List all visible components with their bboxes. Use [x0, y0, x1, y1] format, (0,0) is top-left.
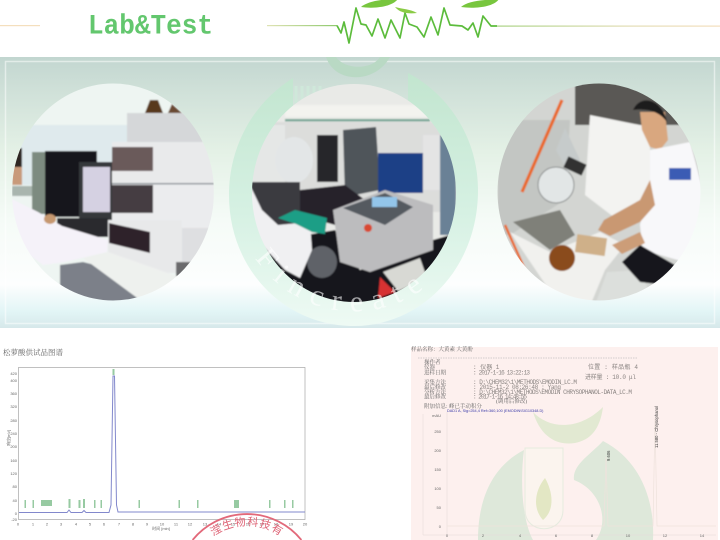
x axis labels: 7: [118, 522, 121, 526]
chart: left chromatogram: [3, 347, 308, 540]
chart title: 松萝酸供试品图谱: [3, 347, 63, 357]
x axis labels: 5: [89, 522, 92, 526]
x axis labels: 19: [289, 522, 294, 526]
report sheet: 11.580 - Chrysophanol: [654, 406, 659, 448]
peak labels: 9.606: [606, 450, 611, 461]
instrument stack: [127, 113, 203, 143]
method metadata: : D:\CHEM32\1\METHODS\EMODIN CHRYSOPHANOL-DATA_LC.M: [473, 389, 632, 396]
baseline and peaks: [19, 376, 305, 512]
x axis labels: 0: [17, 522, 20, 526]
photo: lab bench analyser: [250, 80, 460, 306]
chart x labels: 14: [700, 533, 705, 538]
x axis labels: 1: [32, 522, 35, 526]
x axis labels: 4: [75, 522, 78, 526]
method metadata: 采集方法: [424, 378, 447, 386]
chart x labels: 8: [591, 533, 594, 538]
chart y labels: 200: [434, 448, 442, 453]
chart x labels: 0: [446, 533, 449, 538]
glove and sleeve: [250, 185, 312, 278]
method metadata: 进样日期: [424, 368, 447, 376]
scientist: [640, 112, 668, 150]
chart y labels: 100: [434, 486, 442, 491]
x axis labels: 6: [103, 522, 106, 526]
x axis labels: 8: [132, 522, 135, 526]
chart x labels: [446, 534, 704, 537]
method metadata: : 2017-1-16 14:48:55: [473, 394, 527, 400]
icon: heartbeat line with leaves: [337, 0, 499, 43]
chart y labels: 50: [437, 505, 442, 510]
y axis labels: 400: [10, 378, 18, 383]
method metadata: 最后修改: [424, 392, 447, 400]
method metadata: : D:\CHEM32\1\METHODS\EMODIN_LC.M: [473, 379, 577, 386]
signal title: DAD1 A, Sig=254,4 Ref=360,100 (EMODIN\SIG10348.D): [447, 409, 544, 413]
watermark logo: [229, 57, 478, 326]
chart x labels: 6: [555, 533, 558, 538]
chart y labels: [432, 413, 442, 529]
bench: [510, 232, 620, 300]
y axis labels: 120: [10, 471, 18, 476]
stamp seal: [192, 513, 302, 540]
glass beaker: [307, 246, 337, 278]
method metadata: 最后修改: [424, 383, 447, 391]
watermark logo: [478, 407, 653, 540]
x axis labels: 3: [60, 522, 63, 526]
chart y labels: 250: [434, 429, 442, 434]
y axis labels: 320: [10, 404, 18, 409]
method metadata: [424, 358, 638, 410]
x axis title: 时间 [min]: [152, 525, 170, 531]
method metadata: 分析方法: [424, 388, 447, 396]
method metadata: 位置 : 样品瓶 4: [588, 363, 638, 371]
watermark brand text: Fincreate: [256, 247, 422, 312]
photo: HPLC lab: [12, 84, 214, 300]
computer tower: [32, 152, 45, 214]
axes: [423, 412, 716, 535]
dashed rule: [418, 358, 637, 359]
chart y labels: 150: [434, 467, 442, 472]
photo: rotary evaporator: [495, 80, 705, 306]
x axis labels: [17, 522, 308, 526]
analyser body: [333, 190, 433, 272]
method metadata: : 2017-1-16 13:22:13: [473, 370, 530, 376]
x axis labels: 10: [160, 522, 165, 526]
bench: [59, 261, 138, 300]
peak labels: [24, 369, 294, 508]
y axis labels: -20: [11, 517, 18, 522]
y axis title: 响应[mV]: [5, 430, 11, 446]
x axis labels: 2: [46, 522, 49, 526]
y axis labels: 280: [10, 418, 18, 423]
x axis labels: 15: [231, 522, 236, 526]
report heading: 样品名称：大黄素 大黄酚: [411, 345, 473, 353]
plot frame: [18, 368, 305, 520]
header: [0, 0, 720, 43]
x axis labels: 9: [146, 522, 149, 526]
method metadata: (调用后修改): [496, 397, 527, 405]
method metadata: : 仪器 1: [473, 364, 500, 371]
title: Lab&Test: [88, 12, 213, 42]
report sheet: [411, 347, 718, 540]
test tube rack: [383, 258, 427, 291]
x axis labels: 13: [203, 522, 208, 526]
flask of brown liquid: [549, 245, 575, 271]
chart x labels: 2: [482, 533, 485, 538]
y axis labels: 40: [13, 498, 18, 503]
y axis labels: 420: [10, 371, 18, 376]
x axis labels: 16: [246, 522, 251, 526]
stamp seal: 滢生物科技有: [210, 516, 284, 536]
x axis labels: 14: [217, 522, 222, 526]
x axis labels: 11: [174, 522, 179, 526]
y axis labels: 360: [10, 391, 18, 396]
header rule right: [497, 26, 720, 27]
y axis labels: [10, 371, 18, 522]
method metadata: 操作者: [424, 358, 441, 366]
chromatogram trace: [447, 418, 716, 526]
chart y labels: 0: [439, 524, 442, 529]
operator: [14, 147, 23, 168]
x axis labels: 17: [260, 522, 265, 526]
y axis labels: 0: [15, 511, 18, 516]
y axis labels: 80: [13, 484, 18, 489]
chart x labels: 10: [626, 533, 631, 538]
method metadata: 附加信息: 峰已手动积分: [424, 402, 482, 410]
document: right chromatogram report: [411, 345, 718, 540]
header rule middle: [267, 25, 337, 26]
x axis labels: 12: [188, 522, 193, 526]
y axis labels: 240: [10, 431, 18, 436]
x axis labels: 20: [303, 522, 308, 526]
chart x labels: 12: [663, 533, 668, 538]
method metadata: : 2015-11-2 08:26:48 : Yang: [473, 384, 561, 391]
y axis labels: 160: [10, 458, 18, 463]
header rule left: [0, 25, 40, 26]
method metadata: 仪器: [424, 363, 436, 371]
photo band: [0, 57, 720, 328]
y axis labels: 200: [10, 444, 18, 449]
bench top: [266, 229, 448, 302]
method metadata: 进样量 : 10.0 μl: [585, 373, 636, 381]
chart y labels: mAU: [432, 413, 441, 418]
chart x labels: 4: [519, 533, 522, 538]
x axis labels: 18: [274, 522, 279, 526]
